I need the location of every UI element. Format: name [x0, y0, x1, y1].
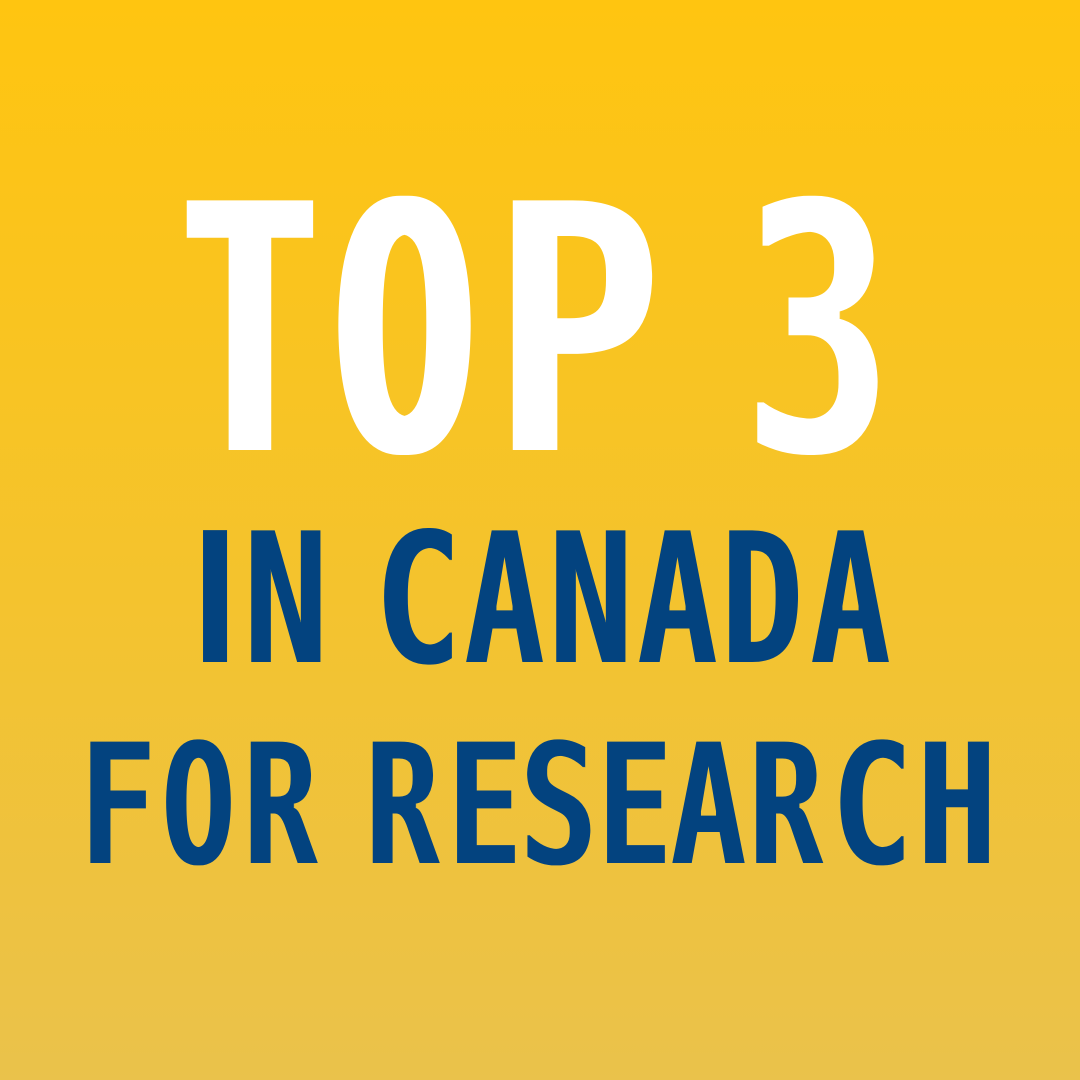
subheading: IN CANADA: A — [810, 493, 891, 709]
subheading: FOR RESEARCH: R — [749, 707, 824, 906]
subheading: IN CANADA: A — [464, 493, 545, 709]
subheading: FOR RESEARCH: R — [244, 707, 319, 906]
heading: TOP 3: 3 — [746, 128, 890, 538]
subheading: FOR RESEARCH: H — [917, 707, 997, 907]
subheading: FOR RESEARCH: O — [162, 706, 235, 906]
subheading: FOR RESEARCH: E — [448, 706, 522, 906]
subheading: IN CANADA: N — [549, 492, 633, 708]
subheading: FOR RESEARCH — [80, 705, 997, 907]
heading: TOP 3: T — [182, 126, 318, 537]
subheading: FOR RESEARCH: F — [80, 705, 156, 906]
heading: TOP 3 — [182, 126, 890, 538]
heading: TOP 3: O — [331, 128, 478, 537]
subheading: IN CANADA: C — [374, 492, 462, 709]
subheading: IN CANADA: D — [721, 493, 803, 708]
subheading: FOR RESEARCH: S — [520, 705, 597, 906]
subheading: FOR RESEARCH: C — [831, 706, 913, 906]
subheading: IN CANADA — [200, 486, 891, 709]
heading: TOP 3: P — [492, 128, 662, 537]
subheading: IN CANADA: I — [200, 486, 230, 705]
subheading: FOR RESEARCH: R — [366, 707, 441, 906]
subheading: FOR RESEARCH: A — [670, 705, 747, 906]
subheading: IN CANADA: N — [244, 492, 328, 708]
subheading: FOR RESEARCH: E — [598, 706, 672, 906]
subheading: IN CANADA: A — [637, 493, 718, 709]
